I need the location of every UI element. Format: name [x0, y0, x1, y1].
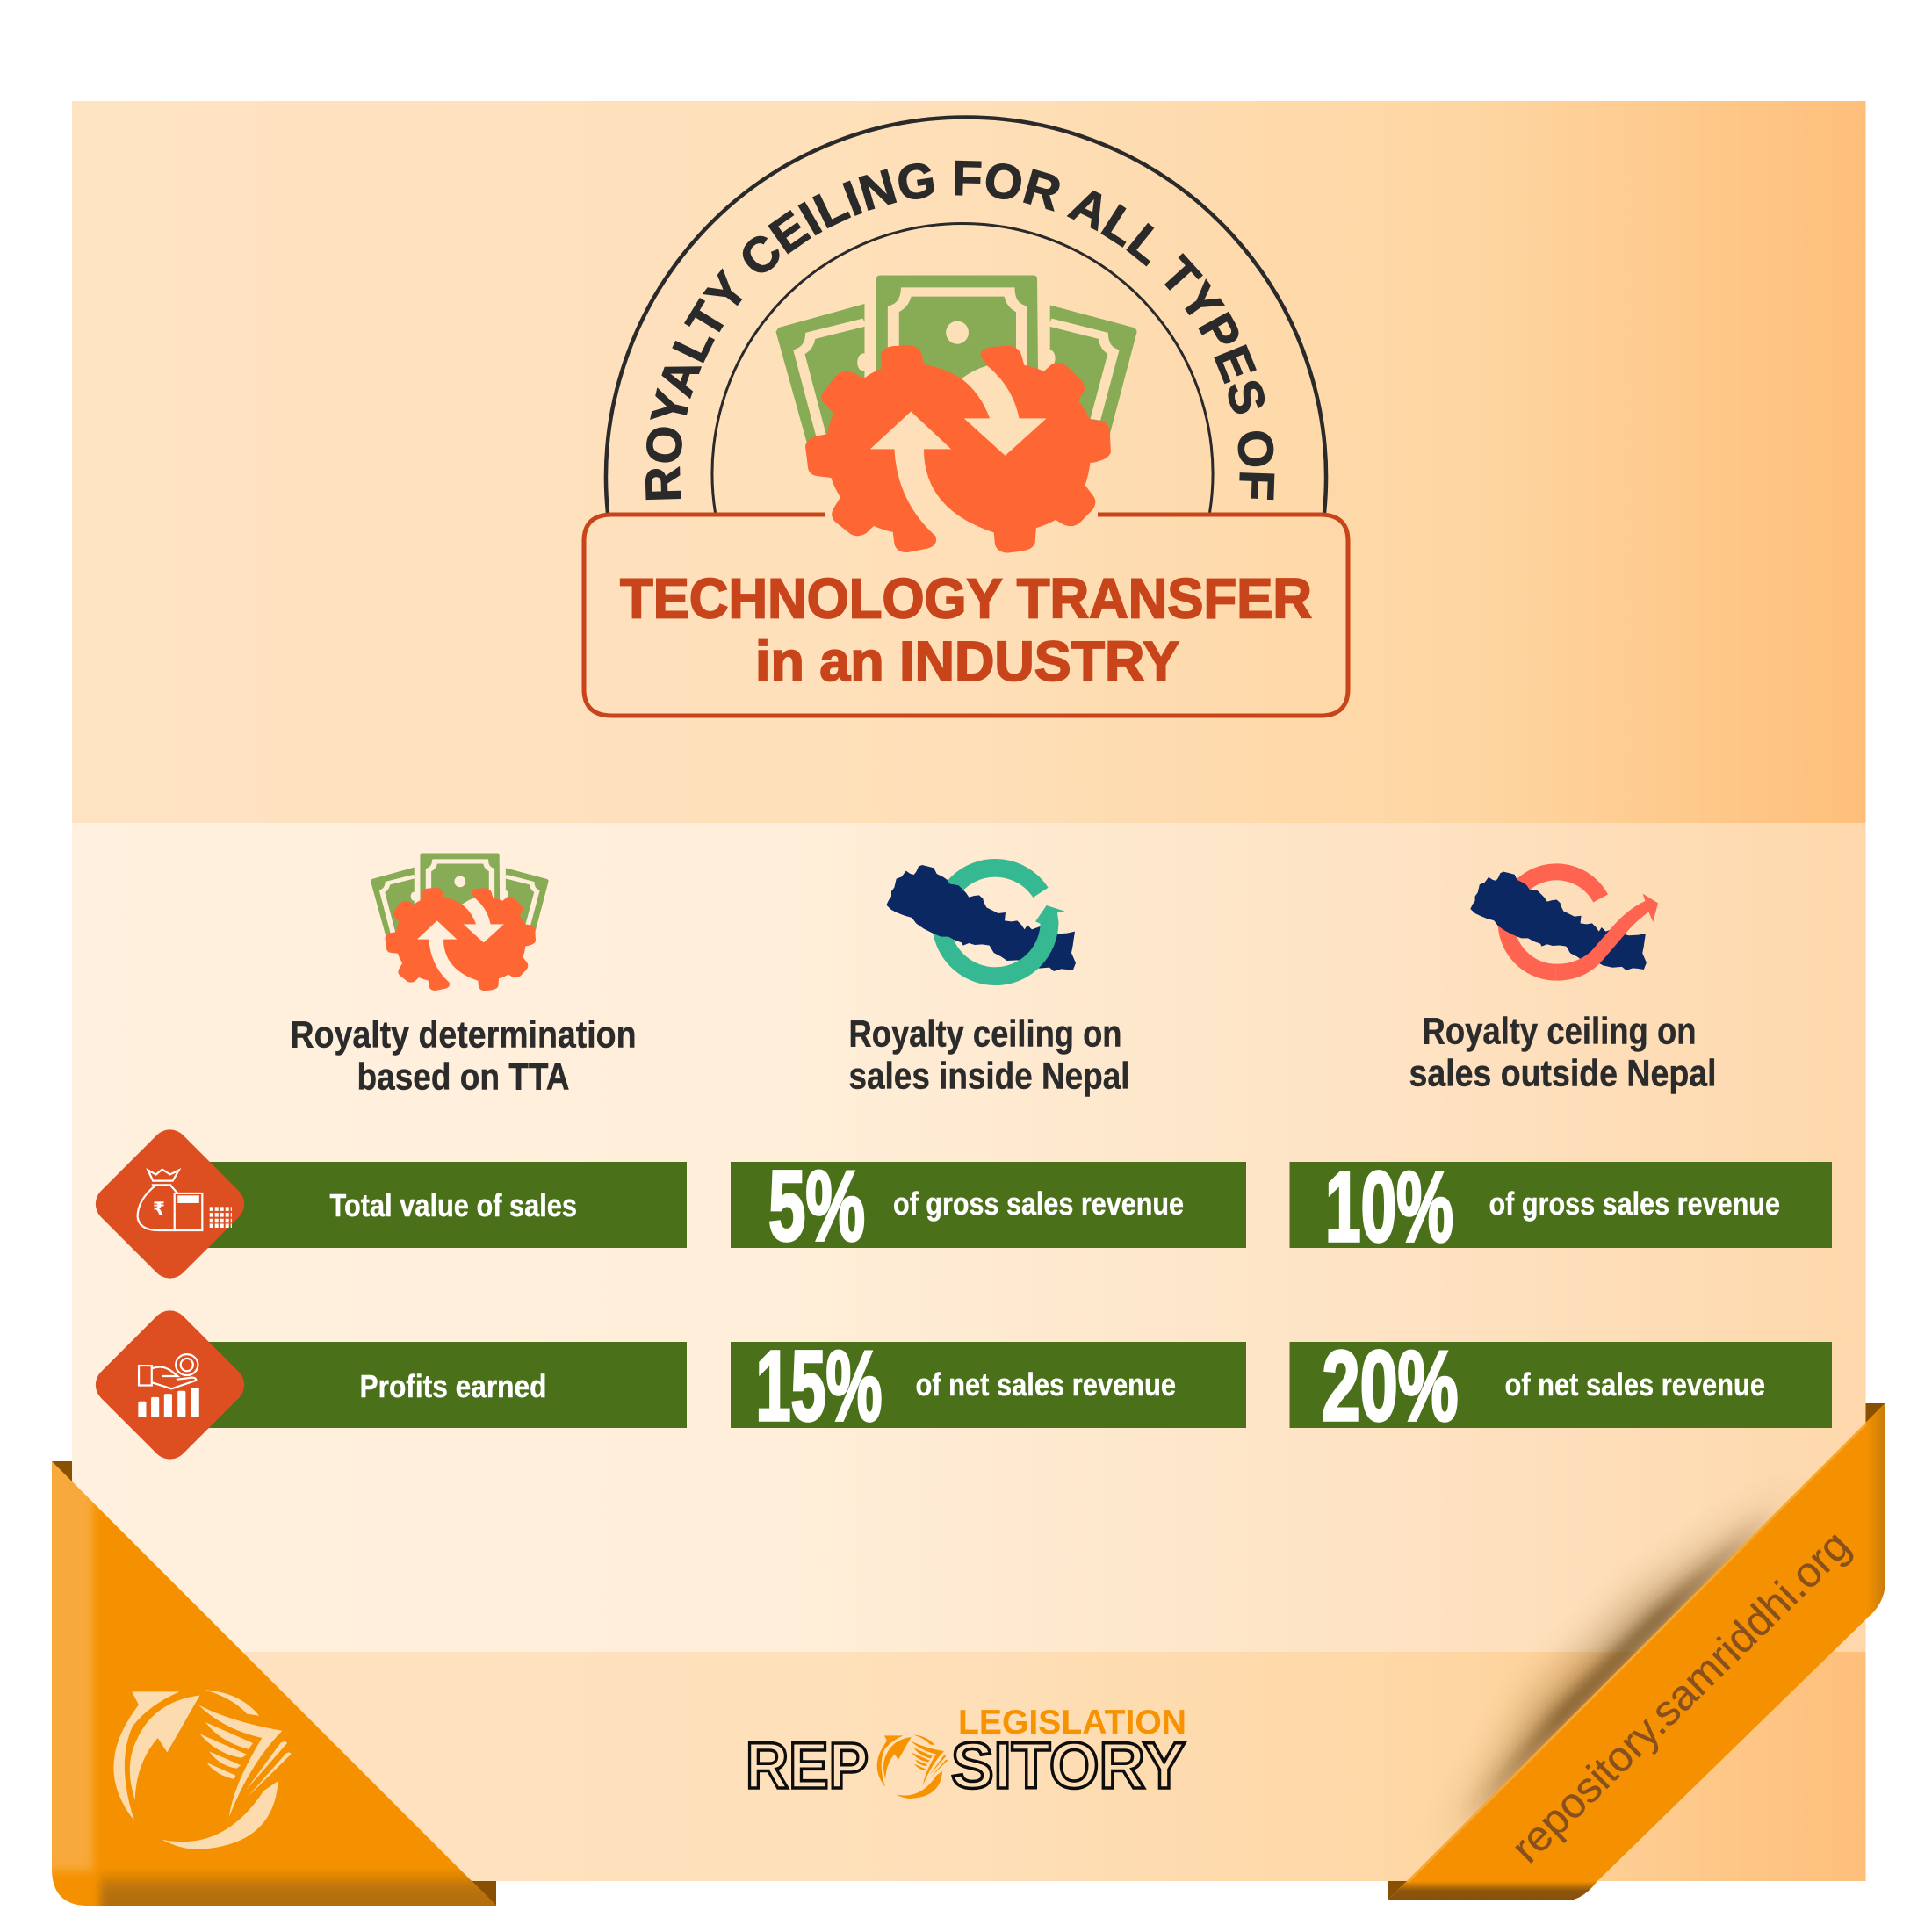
- icon: money and gear with arrows: [776, 275, 1137, 553]
- panel: footer background: [72, 1652, 1865, 1881]
- row 2, column 3: 20 percent of net sales revenue: [1289, 1330, 1832, 1441]
- panel: top header background: [72, 101, 1865, 823]
- title line 2: in an INDUSTRY: [755, 630, 1179, 693]
- icon: Nepal map with teal cycle arrow: [886, 865, 1076, 977]
- icon: Nepal map with red export arrow: [1470, 872, 1658, 981]
- row 1, column 3: 10 percent of gross sales revenue: of gross sales revenue: [1489, 1186, 1780, 1222]
- icon: diamond with money bag and calculator: [88, 1122, 252, 1286]
- title box: [584, 515, 1348, 716]
- row 2, column 2: 15 percent of net sales revenue: [731, 1330, 1246, 1441]
- column 3 header: sales outside Nepal: [1409, 872, 1716, 1094]
- row 2, column 1: profits earned bar: [202, 1342, 687, 1428]
- row 2, column 2: 15 percent of net sales revenue: of net sales revenue: [915, 1366, 1176, 1402]
- column 1 header: royalty determination: [290, 854, 636, 1098]
- column 2 heading: Royalty ceiling on: [848, 1013, 1122, 1056]
- row 1, column 2: 5 percent of gross sales revenue: of gross sales revenue: [893, 1186, 1184, 1222]
- website text: repository.samriddhi.org: [1503, 1522, 1859, 1872]
- row 2, column 1: profits earned bar: Profits earned: [360, 1368, 546, 1404]
- row 2, column 2: 15 percent of net sales revenue: 15%: [755, 1330, 882, 1441]
- row 1, column 2: 5 percent of gross sales revenue: [731, 1150, 1246, 1261]
- row 2, column 3: 20 percent of net sales revenue: of net sales revenue: [1505, 1366, 1765, 1402]
- row 1, column 2: 5 percent of gross sales revenue: 5%: [768, 1150, 865, 1261]
- icon: money and gear small: [371, 854, 549, 991]
- corner ribbon: bottom left with logo: [52, 1461, 496, 1906]
- logo mark on ribbon: [113, 1690, 292, 1849]
- column 2 header: sales inside Nepal: [848, 865, 1129, 1098]
- title line 1: TECHNOLOGY TRANSFER: [620, 567, 1312, 631]
- logo mark: [877, 1734, 948, 1799]
- corner ribbon: bottom right with website: [1388, 1403, 1885, 1900]
- row 1, column 1: total value of sales bar: Total value of sales: [330, 1187, 577, 1223]
- SITORY wordmark: SITORY: [951, 1729, 1186, 1802]
- column 3 heading: Royalty ceiling on: [1423, 1010, 1697, 1052]
- column 1 heading: based on TTA: [357, 1056, 569, 1098]
- row 1, column 3: 10 percent of gross sales revenue: [1289, 1151, 1832, 1262]
- column 2 heading: sales inside Nepal: [848, 1056, 1129, 1098]
- inner arch line: [712, 223, 1213, 513]
- panel: middle content background: [72, 823, 1865, 1652]
- curved heading: ROYALTY CEILING FOR ALL TYPES OF: [645, 160, 1275, 501]
- footer logo: Legislation Repository: [746, 1704, 1186, 1802]
- LEGISLATION wordmark: LEGISLATION: [958, 1704, 1186, 1741]
- outer arch line: [606, 118, 1326, 513]
- column 3 heading: sales outside Nepal: [1409, 1052, 1716, 1094]
- icon: diamond with money bag and calculator: ₹: [153, 1200, 165, 1219]
- column 1 heading: Royalty determination: [290, 1013, 636, 1056]
- row 1, column 3: 10 percent of gross sales revenue: 10%: [1325, 1151, 1453, 1262]
- row 1, column 1: total value of sales bar: [202, 1162, 687, 1248]
- icon: diamond with hand, coin and bars: [88, 1303, 252, 1467]
- ribbon shadow: [1453, 1502, 1779, 1827]
- header emblem: arched title, money gear icon and title box: [581, 115, 1351, 718]
- row 2, column 3: 20 percent of net sales revenue: 20%: [1323, 1330, 1458, 1441]
- REP wordmark: REP: [746, 1729, 869, 1802]
